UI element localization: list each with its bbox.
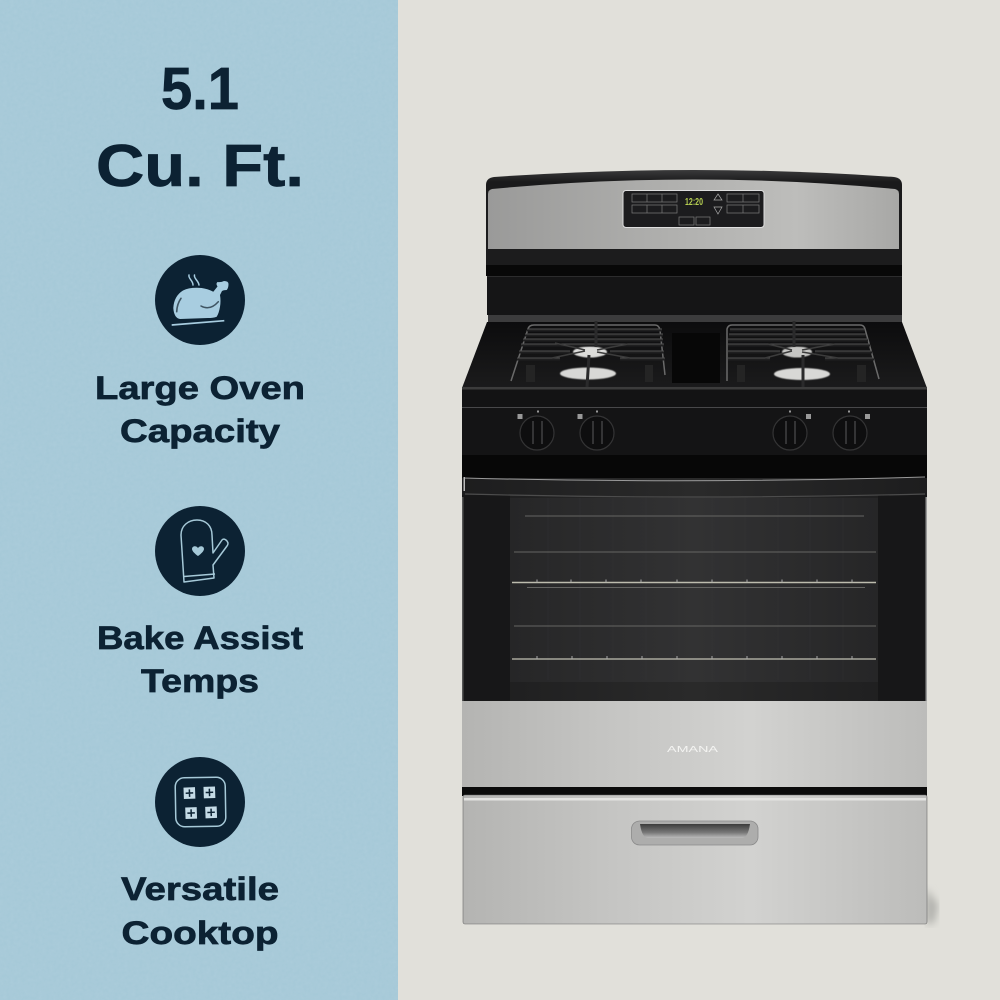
feature label: Versatile Cooktop xyxy=(121,871,279,951)
oven window with racks xyxy=(510,498,878,682)
rear panel xyxy=(487,276,902,322)
burner knobs xyxy=(518,410,870,450)
gap above drawer xyxy=(462,787,927,796)
heading: 5.1 Cu. Ft.: 5.1 xyxy=(161,56,239,122)
oven door xyxy=(462,477,927,701)
right background panel xyxy=(398,0,1000,1000)
feature label: Large Oven Capacity xyxy=(95,370,305,449)
control panel with clock: 12:20 xyxy=(685,196,703,208)
feature label: Bake Assist Temps: Temps xyxy=(141,663,259,699)
control panel with clock xyxy=(623,190,764,228)
icon: oven mitt xyxy=(155,506,245,596)
cooktop surface xyxy=(462,322,927,388)
icon: cooktop xyxy=(155,757,245,847)
front lip and control strip xyxy=(462,387,927,478)
stainless lower panel with brand xyxy=(462,701,927,788)
feature label: Versatile Cooktop: Cooktop xyxy=(122,915,278,951)
backguard xyxy=(486,170,902,276)
drawer handle xyxy=(632,821,758,845)
feature label: Bake Assist Temps xyxy=(97,620,303,699)
feature label: Large Oven Capacity: Capacity xyxy=(120,413,280,449)
icon: roast turkey xyxy=(155,255,245,345)
feature label: Versatile Cooktop: Versatile xyxy=(121,871,279,907)
right burner and grate xyxy=(727,321,879,387)
left burner and grate xyxy=(511,321,665,387)
gas range xyxy=(462,170,938,924)
feature label: Large Oven Capacity: Large Oven xyxy=(95,370,305,406)
stainless lower panel with brand: AMANA xyxy=(667,745,719,754)
feature label: Bake Assist Temps: Bake Assist xyxy=(97,620,303,656)
heading: 5.1 Cu. Ft.: Cu. Ft. xyxy=(96,133,304,199)
heading: 5.1 Cu. Ft. xyxy=(96,56,304,199)
left blue panel xyxy=(0,0,398,1000)
storage drawer xyxy=(463,795,927,924)
floor shadow xyxy=(926,888,938,924)
